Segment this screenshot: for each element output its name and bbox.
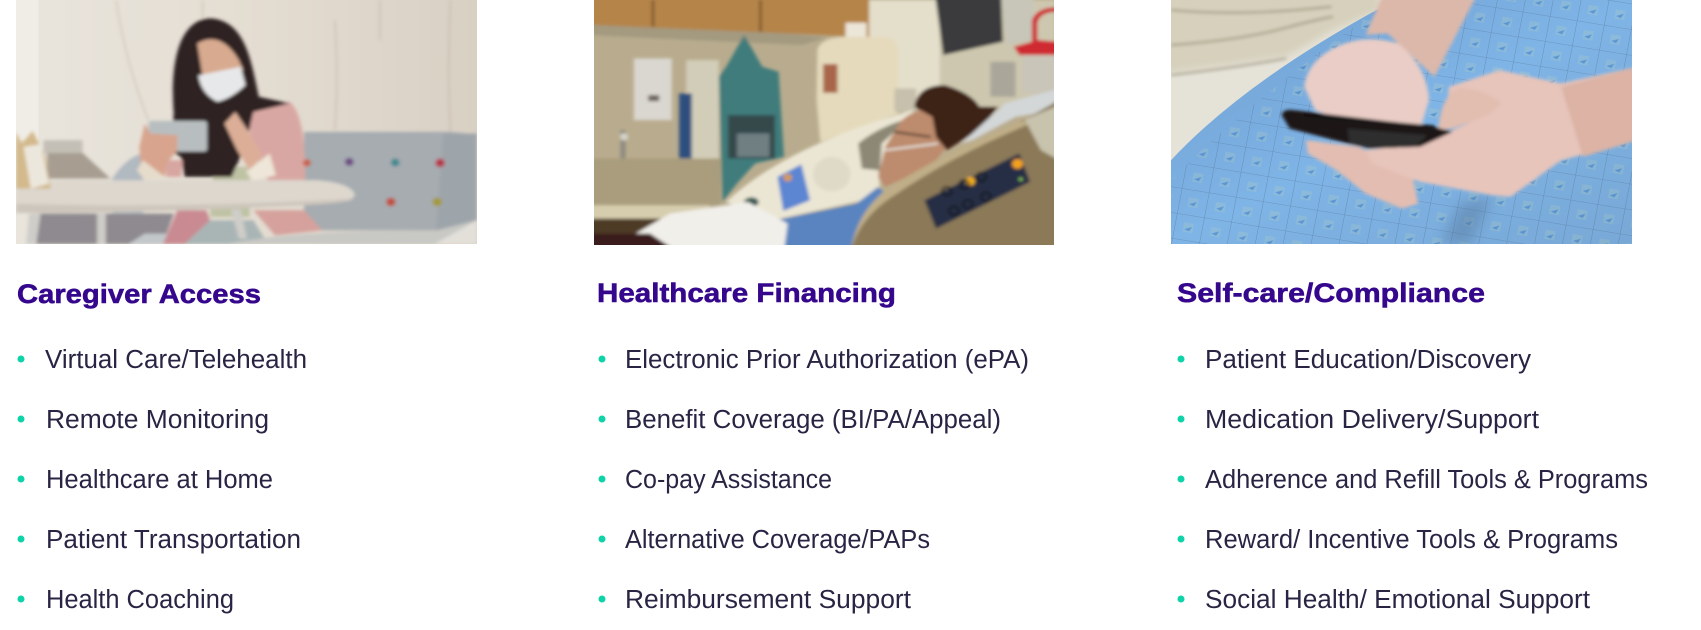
bullet list: caregiver access: Virtual Care/Telehealth [45, 346, 307, 374]
panel: self-care compliance [1163, 0, 1648, 614]
bullet list: healthcare financing [598, 346, 1029, 614]
bullet list: caregiver access: Health Coaching [46, 586, 234, 614]
bullet list: healthcare financing: Electronic Prior Authorization (ePA) [625, 346, 1029, 374]
bullet list: healthcare financing: Reimbursement Support [625, 586, 911, 614]
bullet list: healthcare financing: Benefit Coverage (BI/PA/Appeal) [625, 406, 1001, 434]
bullet list: self-care compliance [1178, 346, 1648, 614]
bullet list: caregiver access [18, 346, 307, 614]
heading: Self-care/Compliance: Self-care/Compliance [1177, 278, 1485, 308]
bullet list: self-care compliance: Social Health/ Emotional Support [1205, 586, 1590, 614]
bullet list: self-care compliance: Patient Education/Discovery [1205, 346, 1531, 374]
bullet list: healthcare financing: Alternative Coverage/PAPs [625, 526, 930, 554]
bullet list: caregiver access: Patient Transportation [46, 526, 301, 554]
photo: woman in mask using phone on sofa [16, 0, 477, 244]
bullet list: caregiver access: Healthcare at Home [46, 466, 273, 494]
photo: hands holding smartphone on hospital gown [1171, 0, 1632, 244]
heading: Healthcare Financing: Healthcare Financing [597, 278, 896, 308]
bullet list: caregiver access: Remote Monitoring [46, 406, 269, 434]
bullet list: self-care compliance: Adherence and Refill Tools & Programs [1205, 466, 1648, 494]
bullet list: self-care compliance: Medication Delivery/Support [1205, 406, 1539, 434]
bullet list: healthcare financing: Co-pay Assistance [625, 466, 832, 494]
panel: caregiver access [16, 0, 477, 614]
panel: healthcare financing [589, 0, 1059, 614]
photo: patient in hospital bed [594, 0, 1054, 245]
bullet list: self-care compliance: Reward/ Incentive Tools & Programs [1205, 526, 1618, 554]
heading: Caregiver Access: Caregiver Access [17, 279, 261, 309]
